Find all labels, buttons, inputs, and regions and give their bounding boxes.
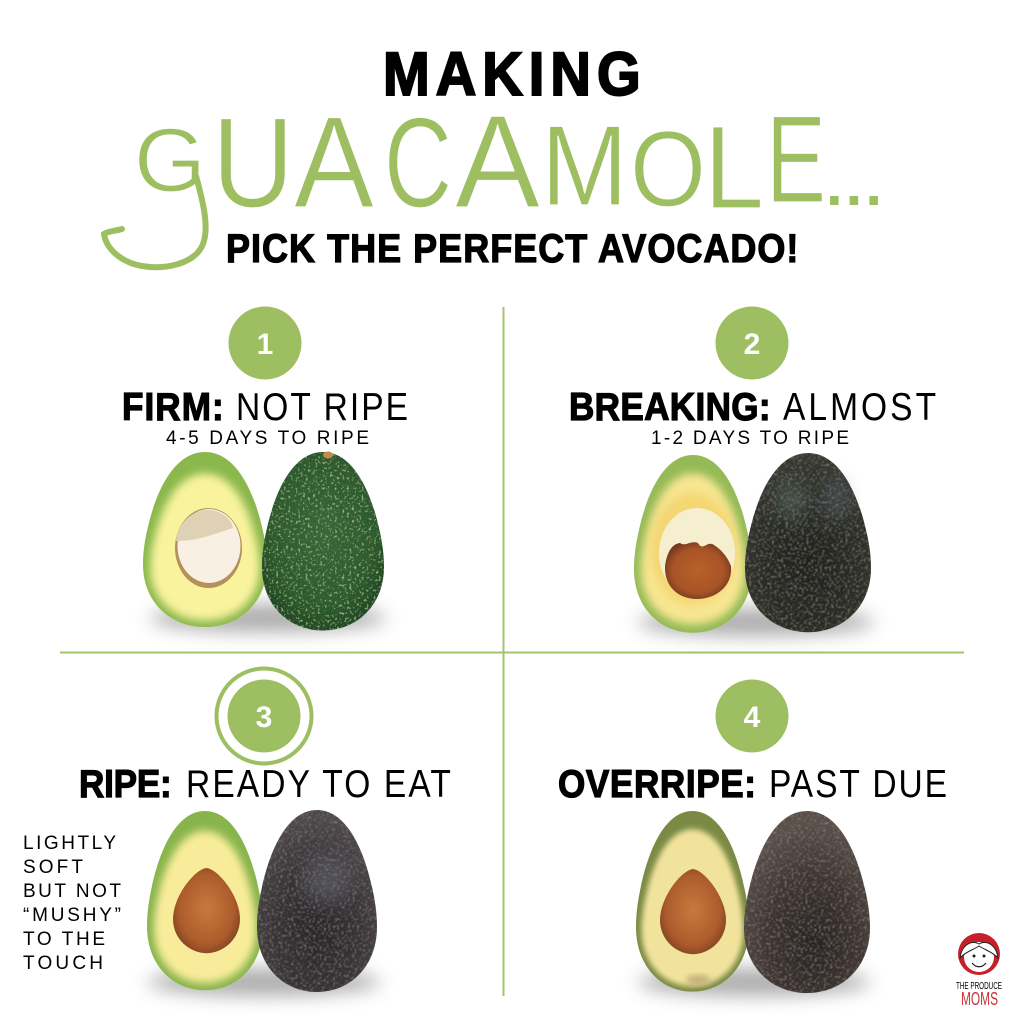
number badge 4: 4 <box>744 701 761 734</box>
panel 4: overripe <box>558 680 947 996</box>
number badge 2: 2 <box>744 328 760 361</box>
avocado whole, darkening <box>745 453 871 632</box>
avocado whole, green <box>262 452 384 630</box>
subtitle: PICK THE PERFECT AVOCADO! <box>226 227 798 271</box>
title: Guacamole: M <box>541 103 628 230</box>
logo wordmark bottom: MOMS <box>961 989 998 1009</box>
heading: firm, not ripe: FIRM: <box>122 384 224 428</box>
avocado whole, overripe <box>744 811 870 993</box>
heading: ripe, ready to eat: RIPE: <box>79 761 172 805</box>
side note: touch: TOUCH <box>23 953 103 974</box>
title: Guacamole: A <box>294 89 374 235</box>
heading: overripe, past due: PAST DUE <box>769 762 947 806</box>
avocado stem <box>323 452 333 458</box>
avocado half, breaking <box>634 455 752 633</box>
avocado half, firm <box>143 452 267 627</box>
title: Guacamole: C <box>384 92 452 235</box>
number badge 4 <box>716 680 788 752</box>
title: Guacamole: U <box>212 92 294 235</box>
title: Making: MAKING <box>383 41 641 109</box>
side note: touch: BUT NOT <box>23 881 121 902</box>
title: Guacamole: L <box>704 102 764 234</box>
number badge 1 <box>228 306 302 380</box>
title: Guacamole <box>104 88 882 267</box>
brown pit <box>173 868 240 953</box>
heading: overripe, past due: OVERRIPE: <box>558 761 756 805</box>
days to ripe: 4-5 DAYS TO RIPE <box>166 428 369 449</box>
number badge 3 with ring: 3 <box>256 701 272 734</box>
shadow <box>638 608 874 636</box>
number badge 2 <box>716 306 788 380</box>
shadow <box>150 604 386 632</box>
side note: touch: SOFT <box>23 857 83 878</box>
number badge 1: 1 <box>257 328 273 361</box>
heading: firm, not ripe <box>122 384 408 429</box>
quadrant dividers <box>60 307 964 996</box>
side note: touch: LIGHTLY <box>23 833 116 854</box>
heading: breaking, almost: ALMOST <box>783 385 936 429</box>
heading: breaking, almost: BREAKING: <box>569 384 771 428</box>
pale seed <box>175 508 242 588</box>
heading: firm, not ripe: NOT RIPE <box>236 385 408 429</box>
avocado half, ripe <box>147 811 263 990</box>
title: Guacamole: E <box>766 91 826 229</box>
heading: breaking, almost <box>569 384 936 429</box>
logo face icon <box>958 933 1000 975</box>
panel 2: breaking <box>569 306 936 636</box>
side note: touch: TO THE <box>23 929 105 950</box>
number badge 3 with ring <box>216 668 312 764</box>
panel 1: firm <box>122 306 408 632</box>
title: Guacamole: A <box>455 88 540 235</box>
seed, cream top and brown base <box>659 508 735 599</box>
logo: the produce moms <box>956 933 1002 1009</box>
shadow <box>148 968 380 996</box>
days to ripe: 1-2 DAYS TO RIPE <box>651 428 849 449</box>
title: Guacamole: ... <box>826 151 882 218</box>
brown pit <box>660 869 726 954</box>
panel 3: ripe <box>23 668 451 996</box>
title: Guacamole: O <box>630 108 706 229</box>
heading: ripe, ready to eat: READY TO EAT <box>186 762 451 806</box>
shadow <box>638 968 870 996</box>
avocado half, overripe <box>636 811 749 992</box>
avocado whole, ripe <box>257 810 377 992</box>
heading: overripe, past due <box>558 761 947 806</box>
side note: touch <box>23 833 121 974</box>
side note: touch: “MUSHY” <box>23 905 121 926</box>
title: Guacamole: G <box>134 111 206 211</box>
